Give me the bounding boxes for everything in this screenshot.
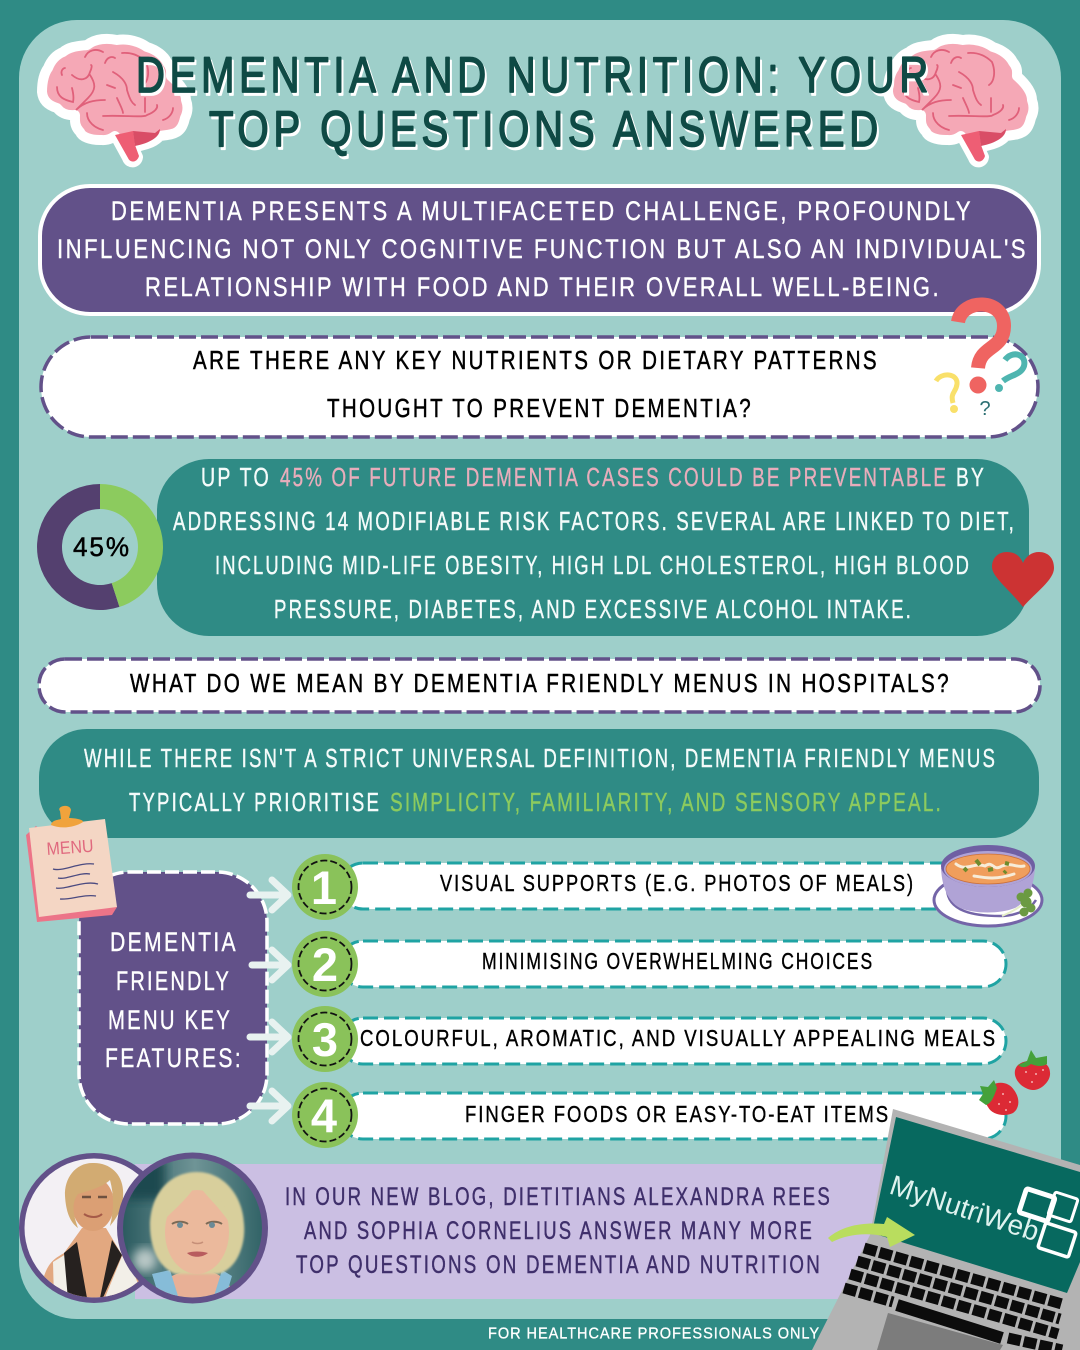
number badge 4 <box>292 1082 358 1148</box>
panel: 45% preventable: UP TO <box>201 462 271 492</box>
chart: 45% donut: 45% <box>73 532 131 562</box>
panel: key features box: DEMENTIA <box>110 927 238 957</box>
number badge 3 <box>292 1006 358 1072</box>
number badge 1: 1 <box>311 861 337 914</box>
question: dementia friendly menus <box>39 659 1040 712</box>
panel: blog callout: TOP QUESTIONS ON DEMENTIA AND NUTRITION <box>296 1251 822 1279</box>
panel: key features box: FEATURES: <box>105 1043 243 1073</box>
portrait: Sophia Cornelius <box>117 1152 268 1304</box>
panel: definition: TYPICALLY PRIORITISE <box>129 787 381 817</box>
question: key nutrients: ARE THERE ANY KEY NUTRIENTS OR DIETARY PATTERNS <box>193 345 879 375</box>
number badge 2 <box>292 931 358 997</box>
icon: soup bowl <box>934 845 1042 926</box>
number badge 4: 4 <box>311 1089 337 1142</box>
arrow: to laptop <box>828 1217 915 1247</box>
arrow 1 <box>250 880 288 910</box>
panel: definition <box>39 729 1039 838</box>
row 2: minimising choices: MINIMISING OVERWHELMING CHOICES <box>482 948 874 974</box>
logo squares <box>1019 1188 1078 1257</box>
chart: 45% donut <box>37 484 163 610</box>
panel: 45% preventable <box>157 459 1029 636</box>
number badge 3: 3 <box>312 1013 338 1066</box>
question: key nutrients <box>41 337 1038 437</box>
icon: right brain <box>888 39 1034 162</box>
panel: key features box: MENU KEY <box>108 1005 232 1035</box>
question: key nutrients: THOUGHT TO PREVENT DEMENTIA? <box>327 393 753 423</box>
row 4: finger foods: FINGER FOODS OR EASY-TO-EAT ITEMS <box>465 1101 890 1127</box>
number badge 1 <box>292 854 358 920</box>
panel: blog callout: IN OUR NEW BLOG, DIETITIANS ALEXANDRA REES <box>285 1183 832 1211</box>
icon: menu note <box>26 806 117 922</box>
arrow 3 <box>250 1022 288 1052</box>
icon: question marks: ? <box>979 398 991 420</box>
portrait: Alexandra Rees <box>19 1153 143 1303</box>
icon: heart <box>992 552 1054 607</box>
panel: blog callout: AND SOPHIA CORNELIUS ANSWER MANY MORE <box>304 1217 814 1245</box>
title: TOP QUESTIONS ANSWERED <box>209 101 883 157</box>
row 4: finger foods <box>340 1093 1006 1139</box>
icon: laptop <box>812 1109 1080 1350</box>
row 1: visual supports: VISUAL SUPPORTS (E.G. PHOTOS OF MEALS) <box>440 870 915 896</box>
panel: 45% preventable: BY <box>956 462 986 492</box>
title <box>136 47 933 157</box>
footer note: FOR HEALTHCARE PROFESSIONALS ONLY <box>488 1326 820 1342</box>
panel: introduction <box>40 186 1039 314</box>
row 3: colourful meals <box>340 1018 1006 1064</box>
arrow 4 <box>250 1091 288 1121</box>
panel: blog callout <box>135 1164 925 1299</box>
panel: key features box <box>79 872 267 1124</box>
panel: key features box: FRIENDLY <box>116 966 231 996</box>
row 2: minimising choices <box>340 941 1006 987</box>
icon: strawberries <box>979 1050 1050 1115</box>
icon: left brain <box>42 39 188 162</box>
row 1: visual supports <box>340 863 1004 909</box>
icon: menu note: MENU <box>46 836 94 859</box>
arrow 2 <box>252 950 288 980</box>
logo text: MyNutriWeb <box>886 1169 1043 1247</box>
icon: question marks <box>936 304 1024 420</box>
number badge 2: 2 <box>312 938 338 991</box>
